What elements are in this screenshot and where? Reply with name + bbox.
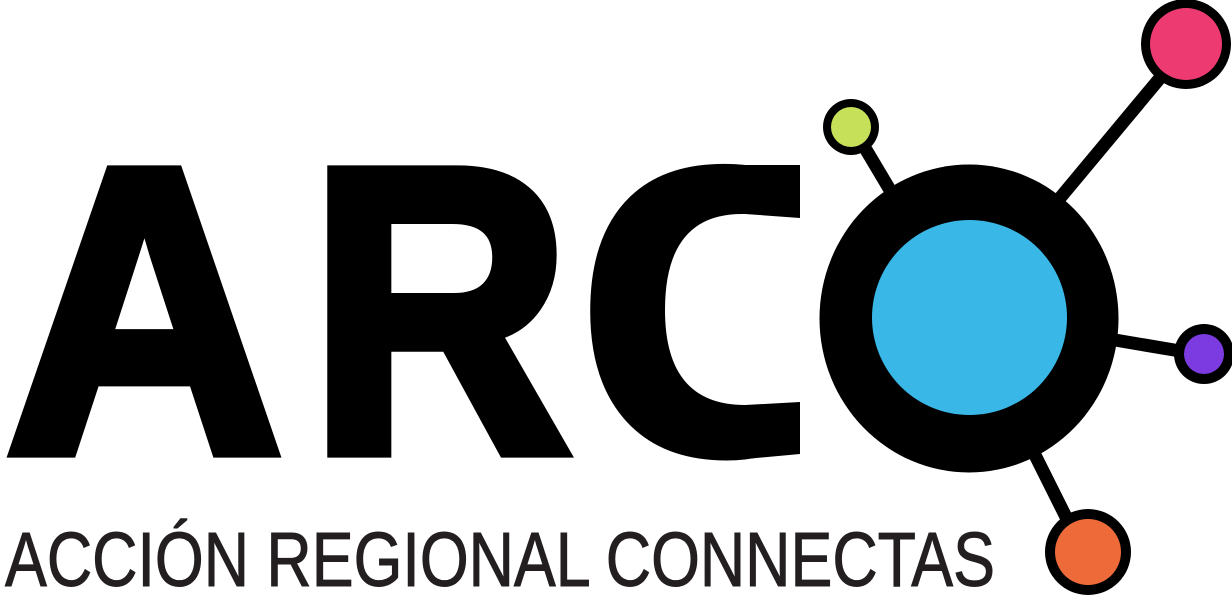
wordmark: ARC bbox=[6, 164, 800, 460]
wordmark: ARC: C bbox=[581, 89, 852, 536]
icon: purple node bbox=[1174, 324, 1232, 384]
wordmark: ARC: R bbox=[309, 85, 571, 538]
icon: pink node bbox=[1141, 0, 1231, 89]
icon: central blue circle forming the O bbox=[820, 164, 1118, 472]
network node: connector lines bbox=[865, 72, 1180, 525]
icon: orange node bbox=[1045, 509, 1131, 595]
icon: green node bbox=[823, 99, 879, 155]
wordmark: ARC: A bbox=[6, 84, 283, 537]
